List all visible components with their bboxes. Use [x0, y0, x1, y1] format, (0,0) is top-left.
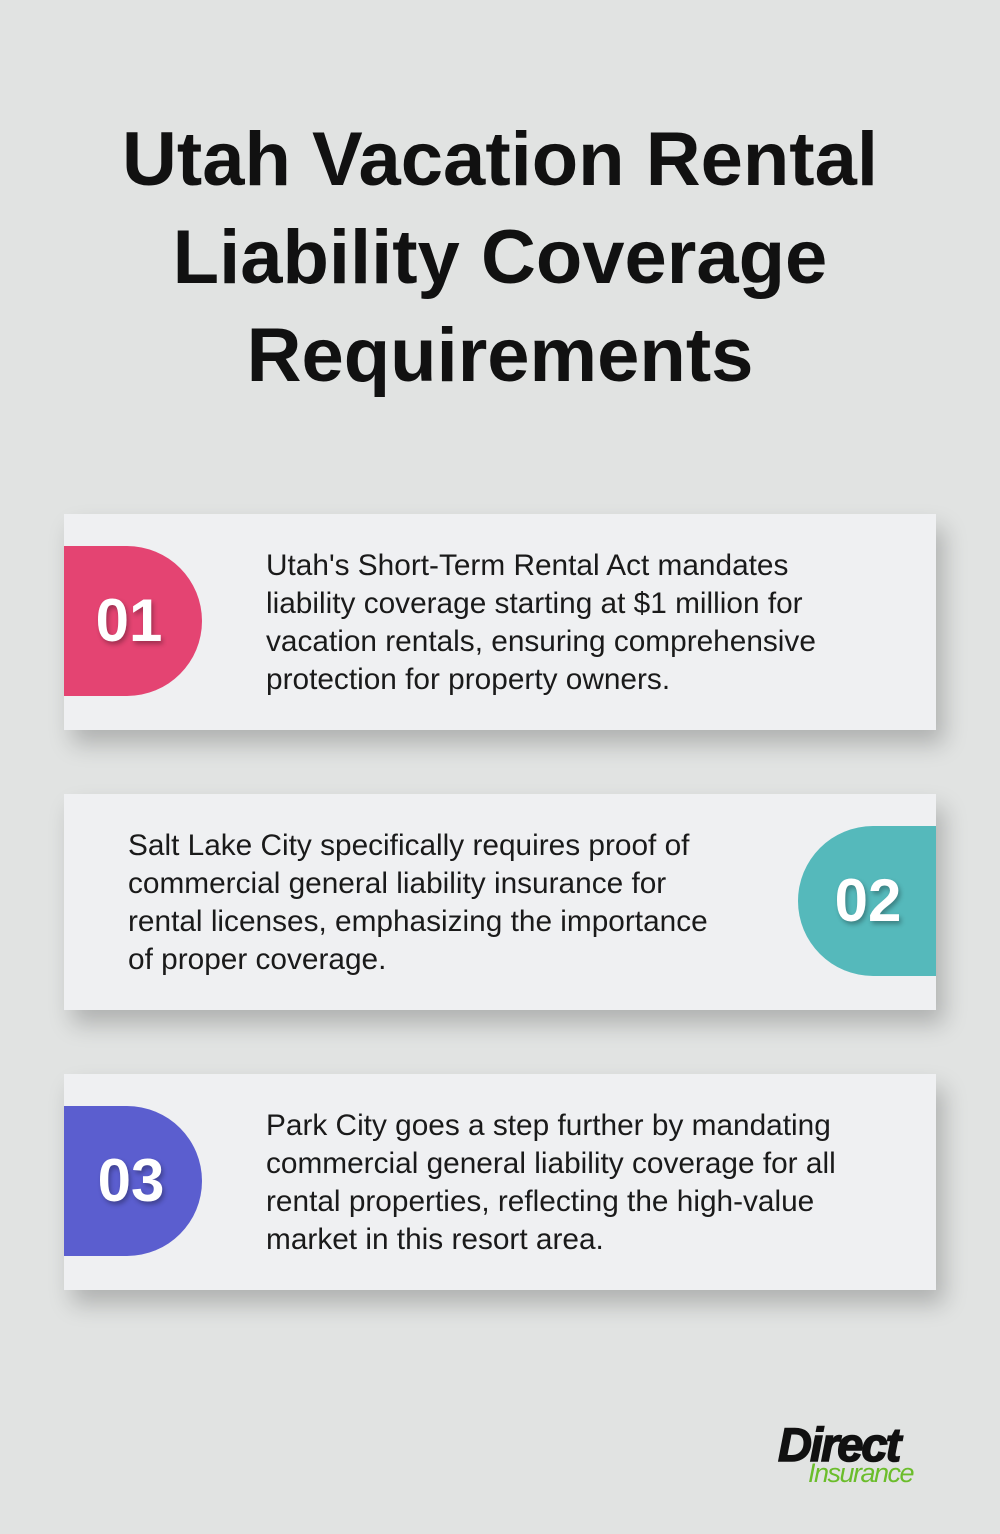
logo [778, 1418, 914, 1488]
text 2: Salt Lake City specifically requires proof of [128, 829, 689, 862]
badge 03: 03 [98, 1147, 164, 1214]
badge 01 [64, 546, 202, 696]
text 1: liability coverage starting at $1 million for [266, 587, 803, 620]
text 2 [128, 829, 708, 976]
title: Requirements [247, 313, 753, 398]
title: Liability Coverage [173, 215, 827, 300]
title: Utah Vacation Rental [122, 117, 878, 202]
badge 02: 02 [835, 867, 901, 934]
panel: card 1 [64, 514, 936, 730]
text 3: market in this resort area. [266, 1223, 604, 1256]
badge 01: 01 [96, 587, 162, 654]
text 2: of proper coverage. [128, 943, 386, 976]
text 2: rental licenses, emphasizing the importance [128, 905, 708, 938]
title [122, 117, 878, 398]
text 3: Park City goes a step further by mandating [266, 1109, 831, 1142]
panel: card 3 [64, 1074, 936, 1290]
text 3 [266, 1109, 836, 1256]
text 1: vacation rentals, ensuring comprehensive [266, 625, 816, 658]
logo: Direct [778, 1418, 899, 1471]
text 3: commercial general liability coverage for all [266, 1147, 836, 1180]
text 1: Utah's Short-Term Rental Act mandates [266, 549, 788, 582]
badge 02 [798, 826, 936, 976]
text 2: commercial general liability insurance for [128, 867, 666, 900]
text 1 [266, 549, 816, 696]
text 1: protection for property owners. [266, 663, 670, 696]
badge 03 [64, 1106, 202, 1256]
text 3: rental properties, reflecting the high-value [266, 1185, 814, 1218]
panel: card 2 [64, 794, 936, 1010]
logo: Insurance [808, 1458, 913, 1488]
